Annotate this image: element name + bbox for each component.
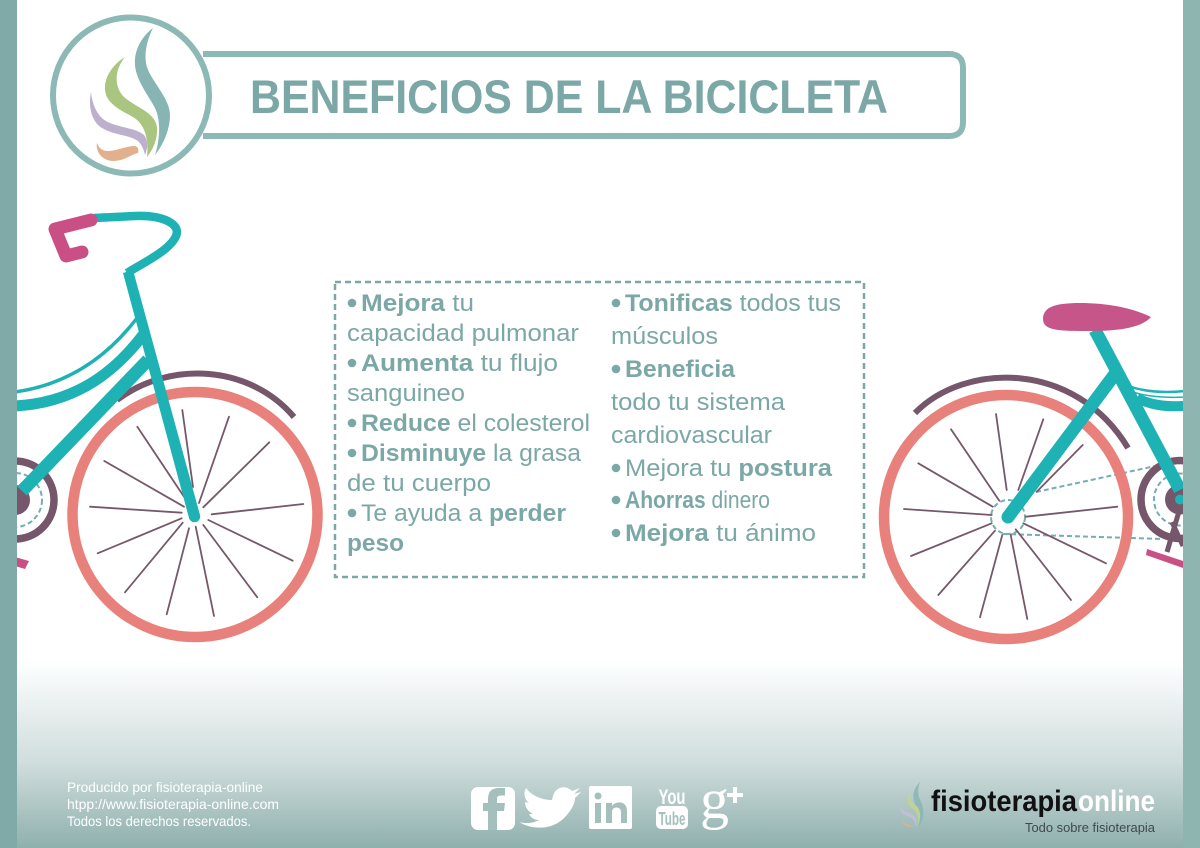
left column benefits: sanguineo — [347, 380, 465, 407]
right column benefits: Mejora tu ánimo — [625, 520, 816, 547]
chain — [991, 465, 1163, 539]
left column benefits — [347, 290, 590, 557]
left column benefits: Mejora tu — [361, 290, 474, 317]
footer logo — [900, 782, 1156, 835]
icon: twitter — [519, 787, 581, 828]
frame tubes — [1008, 330, 1185, 517]
footer credits: Producido por fisioterapia-online — [67, 779, 263, 795]
icon: google plus — [700, 769, 743, 831]
icon: youtube: Tube — [658, 809, 686, 829]
tagline: Todo sobre fisioterapia — [1025, 820, 1156, 835]
right column benefits — [611, 290, 841, 547]
bottom gradient band — [0, 660, 1200, 848]
left column benefits: Disminuye la grasa — [361, 440, 582, 467]
benefits panel — [335, 282, 864, 577]
illustration: front half of bicycle — [0, 216, 318, 637]
title: BENEFICIOS DE LA BICICLETA — [250, 70, 888, 123]
left column benefits: Reduce el colesterol — [361, 410, 590, 437]
social icons — [471, 769, 743, 831]
icon: facebook — [471, 787, 515, 830]
saddle — [1043, 303, 1151, 331]
left sidebar — [0, 0, 17, 848]
right column benefits: todo tu sistema — [611, 389, 786, 416]
dashed box — [335, 282, 864, 577]
icon: youtube — [656, 786, 688, 829]
title frame — [203, 54, 963, 136]
logo badge — [53, 18, 209, 174]
wordmark: online — [1078, 785, 1155, 818]
rear axle — [1175, 494, 1185, 504]
fork — [123, 270, 200, 522]
right column benefits: Beneficia — [625, 356, 736, 383]
pedal — [15, 557, 29, 569]
left column benefits: Aumenta tu flujo — [361, 350, 558, 377]
front chainring — [0, 461, 54, 539]
left column benefits: peso — [347, 530, 404, 557]
crank — [1167, 508, 1183, 552]
pedal — [1146, 549, 1183, 568]
frame tubes — [15, 318, 148, 491]
handlebar — [94, 216, 177, 273]
left column benefits: de tu cuerpo — [347, 470, 491, 497]
rear wheel — [884, 395, 1128, 639]
rear fender — [915, 378, 1128, 448]
icon: youtube: You — [658, 786, 686, 809]
footer credits — [67, 779, 279, 829]
icon: google plus: g — [700, 769, 729, 831]
footer credits: Todos los derechos reservados. — [67, 813, 251, 829]
rear chainring — [1141, 460, 1200, 538]
illustration: rear half of bicycle — [884, 303, 1200, 639]
icon: linkedin — [589, 786, 632, 829]
wordmark: fisioterapia — [931, 785, 1077, 818]
right column benefits: Ahorras dinero — [625, 487, 770, 514]
left column benefits: Te ayuda a perder — [361, 500, 566, 527]
front fender — [117, 374, 294, 417]
front wheel — [72, 392, 318, 637]
left column benefits: capacidad pulmonar — [347, 320, 579, 347]
footer credits: htpp://www.fisioterapia-online.com — [67, 796, 279, 812]
right column benefits: músculos — [611, 323, 718, 350]
right sidebar — [1183, 0, 1200, 848]
right column benefits: Mejora tu postura — [625, 455, 833, 482]
small flame mark — [900, 782, 923, 828]
right column benefits: Tonificas todos tus — [625, 290, 841, 317]
right column benefits: cardiovascular — [611, 422, 772, 449]
handlebar grip — [55, 220, 91, 256]
